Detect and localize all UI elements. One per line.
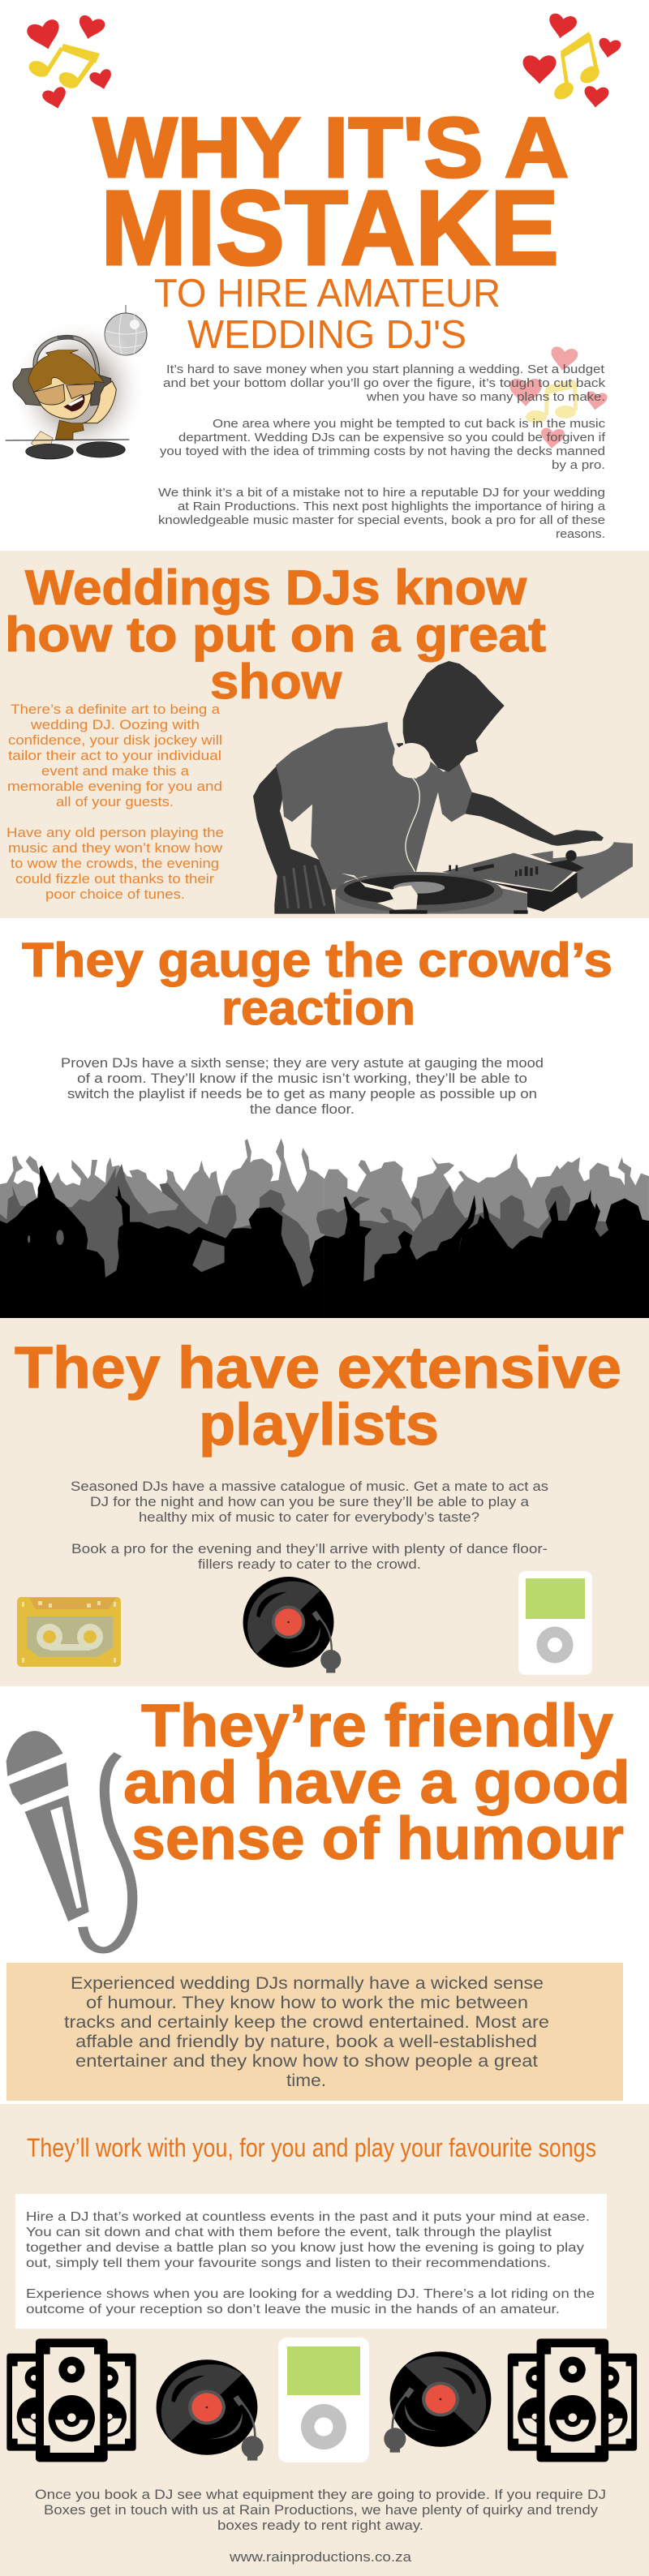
intro text: at Rain Productions. This next post highlights the importance of hiring a — [178, 500, 606, 513]
text block: DJ for the night and how can you be sure they’ll be able to play a — [90, 1495, 530, 1509]
text block: confidence, your disk jockey will — [8, 733, 222, 748]
panel: favourite songs — [0, 2104, 649, 2576]
icon: disco ball — [105, 305, 147, 355]
icon: music player — [278, 2338, 369, 2462]
icon: left speakers — [6, 2338, 136, 2462]
icon: cartoon DJ — [6, 319, 146, 462]
white text box: outcome of your reception so don’t leave the music in the hands of an amateur. — [26, 2303, 560, 2316]
panel: playlists — [0, 1318, 649, 1686]
panel: intro — [0, 0, 649, 551]
heading — [5, 560, 546, 709]
icon: faded hearts and note — [509, 346, 608, 449]
callout: of humour. They know how to work the mic between — [86, 1994, 528, 2012]
intro text: you toyed with the idea of trimming costs by not having the decks manned — [160, 445, 605, 458]
closing text: Boxes get in touch with us at Rain Productions, we have plenty of quirky and trendy — [44, 2502, 599, 2518]
text block: Seasoned DJs have a massive catalogue of music. Get a mate to act as — [71, 1479, 548, 1494]
text block: switch the playlist if needs be to get as many people as possible up on — [67, 1087, 537, 1101]
text block: the dance floor. — [250, 1102, 355, 1117]
callout: tracks and certainly keep the crowd entertained. Most are — [64, 2013, 549, 2032]
heading — [15, 1336, 621, 1458]
text block: tailor their act to your individual — [8, 749, 221, 763]
white text box: You can sit down and chat with them before the event, talk through the playlist — [26, 2226, 552, 2239]
heading: sense of humour — [131, 1805, 624, 1872]
intro text: department. Wedding DJs can be expensive so you could be forgiven if — [178, 431, 606, 444]
title — [93, 101, 569, 357]
text block: Have any old person playing the — [6, 826, 224, 840]
title: MISTAKE — [101, 168, 559, 287]
text block: There’s a definite art to being a — [11, 702, 221, 717]
heading — [123, 1692, 630, 1872]
panel: great show — [0, 551, 649, 918]
heading: Weddings DJs know — [25, 560, 527, 615]
icon: hearts and music note right — [522, 13, 621, 109]
icon: left vinyl record — [157, 2359, 264, 2461]
website url: www.rainproductions.co.za — [229, 2549, 412, 2565]
callout: entertainer and they know how to show people a great — [75, 2052, 538, 2071]
intro text: It’s hard to save money when you start planning a wedding. Set a budget — [166, 363, 604, 376]
text block: event and make this a — [41, 764, 190, 779]
closing text: Once you book a DJ see what equipment they are going to provide. If you require DJ — [35, 2487, 606, 2502]
icon: vinyl record — [243, 1577, 341, 1673]
icon: microphone — [6, 1731, 132, 1950]
white text box: together and devise a battle plan so you know just how the evening is going to play — [26, 2241, 584, 2255]
intro text: knowledgeable music master for special events, book a pro for all of these — [158, 514, 605, 527]
title: WEDDING DJ'S — [187, 313, 466, 357]
text block: could fizzle out thanks to their — [15, 872, 215, 887]
heading — [22, 934, 612, 1035]
intro text: One area where you might be tempted to cut back is in the music — [213, 418, 605, 431]
intro text: We think it’s a bit of a mistake not to hire a reputable DJ for your wedding — [158, 487, 605, 500]
callout: affable and friendly by nature, book a well-established — [75, 2033, 537, 2051]
text block: wedding DJ. Oozing with — [30, 718, 200, 732]
intro text — [158, 363, 606, 541]
icon: music player — [518, 1571, 592, 1675]
title: WHY IT'S A — [93, 101, 569, 195]
heading: They gauge the crowd’s — [22, 934, 612, 987]
heading: how to put on a great — [5, 608, 546, 662]
title: TO HIRE AMATEUR — [154, 272, 501, 316]
text block — [6, 702, 224, 902]
white text box: Hire a DJ that’s worked at countless events in the past and it puts your mind at ease. — [26, 2210, 590, 2224]
text block: of a room. They’ll know if the music isn’t working, they’ll be able to — [77, 1071, 527, 1086]
heading: They’re friendly — [141, 1692, 613, 1759]
text block: to wow the crowds, the evening — [11, 857, 219, 871]
icon: cassette — [17, 1597, 121, 1667]
heading: and have a good — [123, 1749, 630, 1816]
panel: crowd reaction — [0, 934, 649, 1318]
icon: hearts and music note left — [25, 14, 114, 111]
text block: poor choice of tunes. — [45, 887, 185, 902]
text block: music and they won’t know how — [8, 841, 222, 856]
heading: show — [210, 655, 342, 709]
intro text: by a pro. — [552, 459, 605, 472]
text block: all of your guests. — [56, 795, 174, 809]
heading: playlists — [199, 1393, 439, 1458]
callout: Experienced wedding DJs normally have a wicked sense — [71, 1974, 544, 1993]
text block: healthy mix of music to cater for everybody’s taste? — [139, 1510, 479, 1525]
text block — [71, 1479, 548, 1572]
heading: They have extensive — [15, 1336, 621, 1401]
DJ silhouette — [253, 661, 633, 914]
callout: time. — [286, 2072, 326, 2090]
closing text — [35, 2487, 606, 2533]
intro text: reasons. — [556, 528, 605, 541]
heading: reaction — [221, 981, 415, 1035]
text block: Proven DJs have a sixth sense; they are very astute at gauging the mood — [61, 1056, 544, 1071]
icon: right speakers — [508, 2338, 637, 2462]
text block: memorable evening for you and — [7, 779, 222, 794]
crowd silhouette — [0, 1138, 649, 1318]
text block: fillers ready to cater to the crowd. — [198, 1557, 421, 1572]
text block — [61, 1056, 544, 1117]
white text box: Experience shows when you are looking for a wedding DJ. There’s a lot riding on the — [26, 2287, 595, 2301]
callout — [6, 1963, 623, 2101]
panel: friendly — [6, 1692, 630, 2101]
intro text: and bet your bottom dollar you’ll go over the figure, it’s tough to cut back — [163, 377, 606, 390]
white text box — [15, 2194, 607, 2329]
white text box: out, simply tell them your favourite songs and listen to their recommendations. — [26, 2256, 551, 2270]
text block: Book a pro for the evening and they’ll arrive with plenty of dance floor- — [71, 1542, 548, 1556]
icon: right vinyl record — [384, 2351, 491, 2453]
closing text: boxes ready to rent right away. — [217, 2518, 423, 2533]
intro text: when you have so many plans to make. — [366, 391, 605, 404]
